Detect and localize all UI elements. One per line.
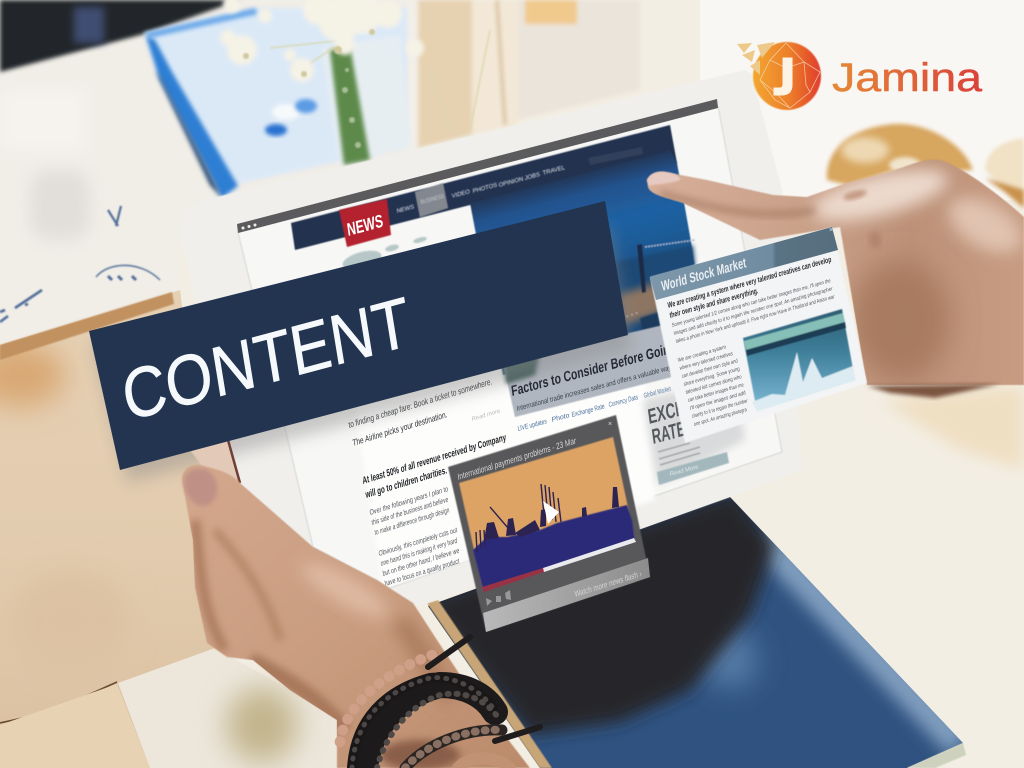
- wood crack: [0, 682, 117, 723]
- popup stock chart: [743, 309, 855, 411]
- article text: The Airline picks your destination.: [352, 409, 448, 448]
- video close mark: ×: [608, 421, 612, 428]
- dark blue notebook: [420, 490, 966, 768]
- world map hint: [341, 236, 427, 273]
- tablet body: [180, 70, 802, 606]
- popup title: World Stock Market: [660, 254, 747, 294]
- nav labels: PHOTOS: [472, 183, 498, 195]
- video lower strip: [483, 558, 650, 632]
- Jamina logo: [737, 42, 983, 110]
- bracelets: [340, 637, 540, 768]
- video progress bar: [482, 538, 636, 592]
- popup body text: takes a photo in New York and uploads it. Five right now Have in Thailand and Asian war: [675, 294, 835, 345]
- nav labels: [396, 165, 566, 215]
- blurred dark object top left: [0, 0, 240, 72]
- banner shadow: [92, 225, 632, 482]
- thumb nail: [184, 469, 217, 506]
- link row: [517, 386, 671, 433]
- popup body text: can develop their own style and: [681, 358, 738, 380]
- exchange rate block: [643, 378, 745, 485]
- screen page: [238, 106, 782, 588]
- nav labels: OPINION: [498, 176, 524, 189]
- paper under left hand: [118, 648, 430, 768]
- video controls: [486, 590, 511, 606]
- patterned plate flecks: [0, 206, 160, 322]
- article text: Over the following years I plan to: [369, 484, 449, 517]
- nav labels: JOBS: [524, 172, 540, 182]
- article text: this side of the business and believe: [371, 495, 449, 527]
- popup body text: I'll open the images and add: [689, 390, 746, 412]
- world stock market popup: [650, 227, 867, 443]
- right hand pointing at screen: [647, 159, 1024, 398]
- video silhouettes: [484, 487, 619, 540]
- logo wordmark: Jamina: [832, 56, 983, 100]
- logo mark: [737, 42, 821, 110]
- hand shadow: [867, 384, 1000, 398]
- article text: have to focus on a quality product: [384, 556, 460, 588]
- popup close mark: ×: [829, 227, 833, 234]
- article text: one hand this is making it very hard: [380, 536, 458, 568]
- article text: Read more: [471, 408, 501, 423]
- video title: International payments problems - 23 Mar: [457, 435, 577, 482]
- blurred wooden box behind the flowers: [407, 0, 640, 150]
- tablet screen: news website: [237, 99, 782, 588]
- news tag: [339, 199, 391, 247]
- popup body text: We are creating a system: [677, 344, 727, 364]
- article text: but on the other hand, I believe we: [382, 546, 460, 578]
- nav labels: BUSINESS: [420, 194, 444, 206]
- blurred pastries: [827, 124, 1024, 208]
- popup body text: talented kid comes along who: [685, 374, 742, 396]
- popup body text: images and add charity to it to regain the number one spot. An amazing photographer: [673, 286, 833, 337]
- site navigation bar: [291, 125, 677, 250]
- article text: to finding a cheap fare: Book a ticket to somewhere.: [348, 376, 493, 430]
- popup body text: charity to it to regain the number: [691, 398, 748, 420]
- fingernail: [647, 172, 680, 186]
- article text: At least 50% of all revenue received by Company: [362, 432, 507, 487]
- exchange rate block: EXCH: [646, 396, 686, 429]
- link row: Global Market: [643, 386, 671, 400]
- video frame: [459, 437, 635, 590]
- link row: Photo: [551, 412, 570, 424]
- popup body text: can take better images than me: [687, 382, 744, 404]
- nav labels: VIDEO: [451, 189, 471, 200]
- popup body text: one spot. An amazing photogra: [693, 407, 748, 428]
- nav labels: NEWS: [396, 204, 415, 215]
- article caption: [503, 325, 677, 417]
- video lower strip: Watch more news flash ›: [574, 568, 642, 599]
- wooden tray edge: [0, 292, 174, 360]
- article text: to make a difference through design: [374, 505, 450, 537]
- popup header: [650, 227, 838, 300]
- article text: will go to children charities.: [364, 465, 448, 501]
- second finger behind tablet: [190, 440, 240, 483]
- video player popup: [448, 415, 650, 632]
- exchange rate block: RATE: [650, 417, 687, 449]
- link row: Exchange Rate: [571, 403, 605, 419]
- popup bold intro: [667, 255, 832, 320]
- article caption: Factors to Consider Before Going: [510, 340, 677, 400]
- exchange rate block: Read More: [669, 464, 700, 478]
- flower vase: [220, 0, 490, 165]
- news tag: NEWS: [346, 211, 384, 240]
- popup bold intro: We are creating a system where very talented creatives can develop: [667, 255, 832, 310]
- article text: Obviously, this completely cuts out: [378, 525, 458, 558]
- article column: [338, 300, 655, 587]
- blurred glass: [0, 90, 90, 240]
- article caption: International trade increases sales and offers a valuable way: [516, 363, 672, 413]
- link row: LIVE updates: [517, 418, 548, 433]
- content banner: [89, 201, 628, 470]
- popup body text: share everything. Some young: [683, 366, 740, 388]
- hero photo with bridge: [470, 150, 702, 375]
- link row: Currency Data: [608, 394, 638, 409]
- banner title: CONTENT: [117, 282, 415, 436]
- blurred blue notebook: [144, 8, 415, 198]
- popup bold intro: their own style and share everything.: [669, 286, 759, 320]
- nav labels: TRAVEL: [542, 165, 566, 177]
- article text: [348, 376, 507, 588]
- popup body text: Some young talented 1/2 comes along who can take better images than me. I'll open the: [671, 278, 831, 329]
- popup body text: where very talented creatives: [679, 351, 733, 372]
- popup body text: [671, 278, 835, 428]
- browser bar: [237, 99, 718, 233]
- left hand holding tablet: [182, 440, 530, 768]
